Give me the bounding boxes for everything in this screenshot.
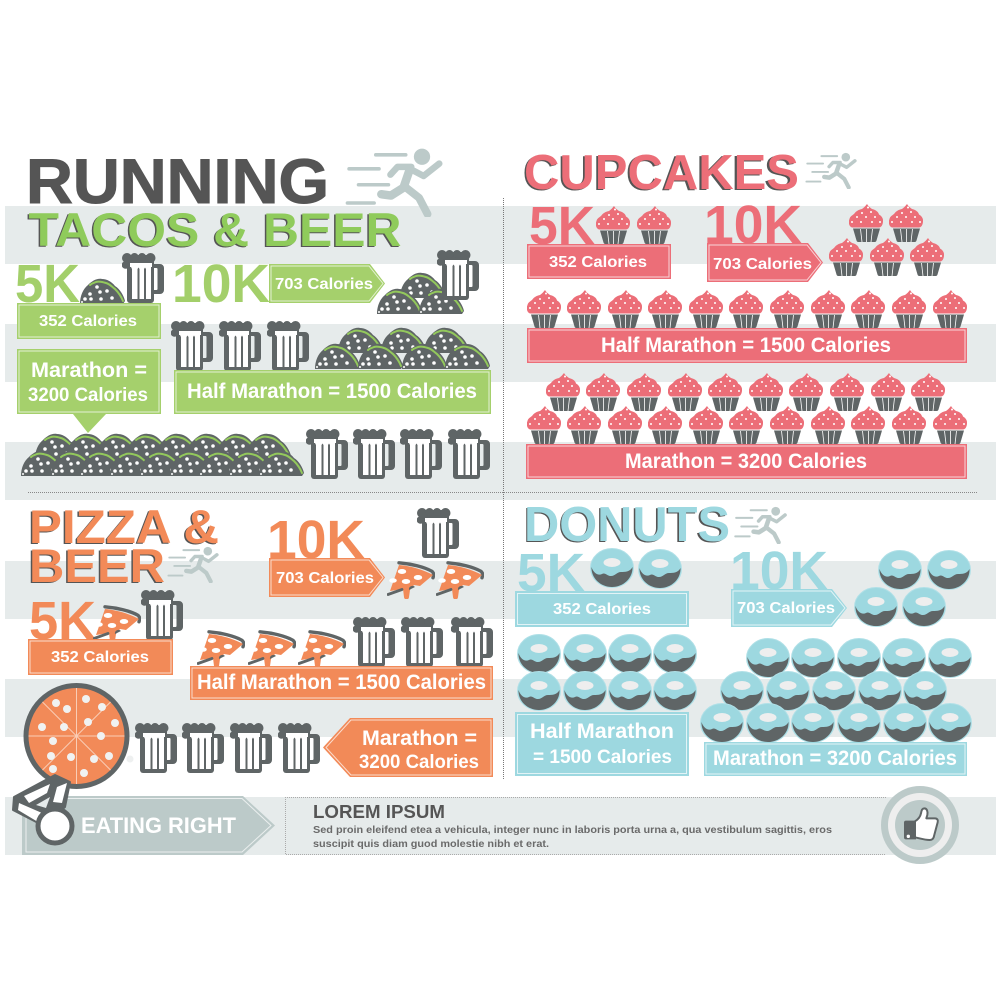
10K calories arrow: [707, 243, 823, 282]
10K calories arrow: [269, 558, 385, 597]
heading: pizza and beer: BEER: [28, 540, 164, 593]
5K calories box: [17, 303, 161, 339]
5K calories box: [28, 639, 173, 675]
5K label: 5K: [529, 196, 595, 256]
heading: pizza and beer: [28, 500, 219, 593]
half marathon box: [527, 328, 967, 363]
5K icons: [94, 590, 183, 644]
10K label: 10K: [730, 541, 828, 601]
background stripes: [5, 206, 996, 855]
half marathon box: [515, 712, 689, 776]
5K calories box: 352 Calories: [51, 649, 149, 666]
marathon arrow: [323, 718, 493, 777]
10K cupcakes: [829, 204, 944, 276]
main title: running: RUNNING: [26, 147, 329, 217]
5K calories box: [515, 591, 689, 627]
marathon box: [704, 742, 967, 776]
5K label: 5K: [15, 254, 80, 314]
half marathon cupcakes: [527, 290, 967, 328]
heading: cupcakes: CUPCAKES: [522, 147, 796, 201]
5K donuts: [590, 548, 682, 588]
marathon box: Marathon = 3200 Calories: [713, 747, 957, 770]
5K icons: [80, 253, 164, 304]
half marathon slices: [198, 632, 345, 668]
marathon callout: Marathon =: [31, 359, 147, 382]
half marathon donuts: [518, 634, 696, 710]
10K icons: [388, 508, 483, 600]
half marathon box: = 1500 Calories: [533, 747, 672, 768]
icon: cupcakes runner: [806, 153, 855, 187]
5K calories box: 352 Calories: [553, 601, 651, 618]
10K label: 10K: [704, 195, 802, 255]
10K label: 10K: [172, 254, 270, 314]
half marathon box: [174, 370, 491, 414]
icon: pizza runner: [168, 547, 217, 581]
5K calories box: 352 Calories: [39, 313, 137, 330]
5K calories box: [527, 244, 671, 279]
10K label: 10K: [267, 510, 365, 570]
10K calories arrow: [731, 589, 847, 627]
lorem body text: [313, 824, 832, 850]
10K calories arrow: 703 Calories: [737, 600, 835, 617]
half marathon box: Half Marathon = 1500 Calories: [601, 334, 891, 357]
10K donuts: [854, 550, 970, 626]
half marathon mugs: [353, 617, 493, 667]
10K calories arrow: 703 Calories: [275, 276, 373, 293]
10K calories arrow: [269, 264, 385, 303]
marathon box: Marathon = 3200 Calories: [625, 450, 867, 473]
lorem heading: LOREM IPSUM: [313, 802, 445, 822]
panel: donuts: [515, 498, 972, 776]
panel: tacos and beer: [15, 203, 491, 479]
heading: donuts: DONUTS: [523, 499, 728, 553]
marathon box: [526, 444, 967, 479]
marathon donuts: [700, 638, 972, 742]
marathon cupcakes: [527, 373, 967, 444]
5K cupcakes: [596, 206, 671, 244]
lorem body text: Sed proin eleifend etea a vehicula, integer nunc in laboris porta urna a, qua vestibulum sagittis, eros: [313, 824, 832, 836]
10K calories arrow: 703 Calories: [713, 256, 812, 273]
heading: donuts: DONUTS: [524, 498, 730, 552]
marathon callout: [17, 349, 161, 433]
5K label: 5K: [517, 543, 585, 603]
half marathon tacos: [315, 328, 490, 369]
heading: pizza and beer: PIZZA &: [28, 501, 218, 554]
eating right arrow: EATING RIGHT: [81, 813, 237, 838]
half marathon box: Half Marathon = 1500 Calories: [197, 671, 486, 694]
icon: donuts runner: [735, 507, 785, 542]
marathon mugs: [135, 723, 320, 773]
heading: cupcakes: CUPCAKES: [524, 146, 799, 200]
icon: large runner: [347, 149, 439, 214]
marathon callout: 3200 Calories: [28, 385, 148, 406]
10K icons: [377, 250, 479, 314]
marathon tacos: [21, 434, 304, 476]
heading: pizza and beer: PIZZA &: [29, 500, 219, 553]
eating right arrow: [22, 796, 275, 855]
lorem ipsum panel: [286, 798, 886, 854]
half marathon box: Half Marathon = 1500 Calories: [187, 380, 477, 403]
panel: cupcakes: [522, 146, 967, 479]
footer banner: [13, 775, 959, 864]
heading: pizza and beer: BEER: [29, 539, 165, 592]
half marathon mugs: [171, 321, 309, 371]
heading: tacos and beer: TACOS & BEER: [27, 204, 400, 257]
marathon arrow: Marathon =: [362, 727, 477, 750]
half marathon box: [190, 666, 493, 700]
lorem body text: suscipit quis diam guod molestie nibh et erat.: [313, 838, 549, 850]
5K calories box: 352 Calories: [549, 254, 647, 271]
5K label: 5K: [29, 591, 96, 651]
panel: pizza and beer: [26, 500, 493, 786]
heading: tacos and beer: TACOS & BEER: [28, 203, 402, 256]
icon: thumbs up: [881, 786, 959, 864]
icon: whole pizza: [26, 686, 134, 786]
10K calories arrow: 703 Calories: [276, 570, 374, 587]
half marathon box: Half Marathon: [530, 720, 674, 743]
marathon arrow: 3200 Calories: [359, 752, 479, 773]
icon: medal: [13, 775, 72, 843]
marathon mugs: [306, 429, 490, 479]
